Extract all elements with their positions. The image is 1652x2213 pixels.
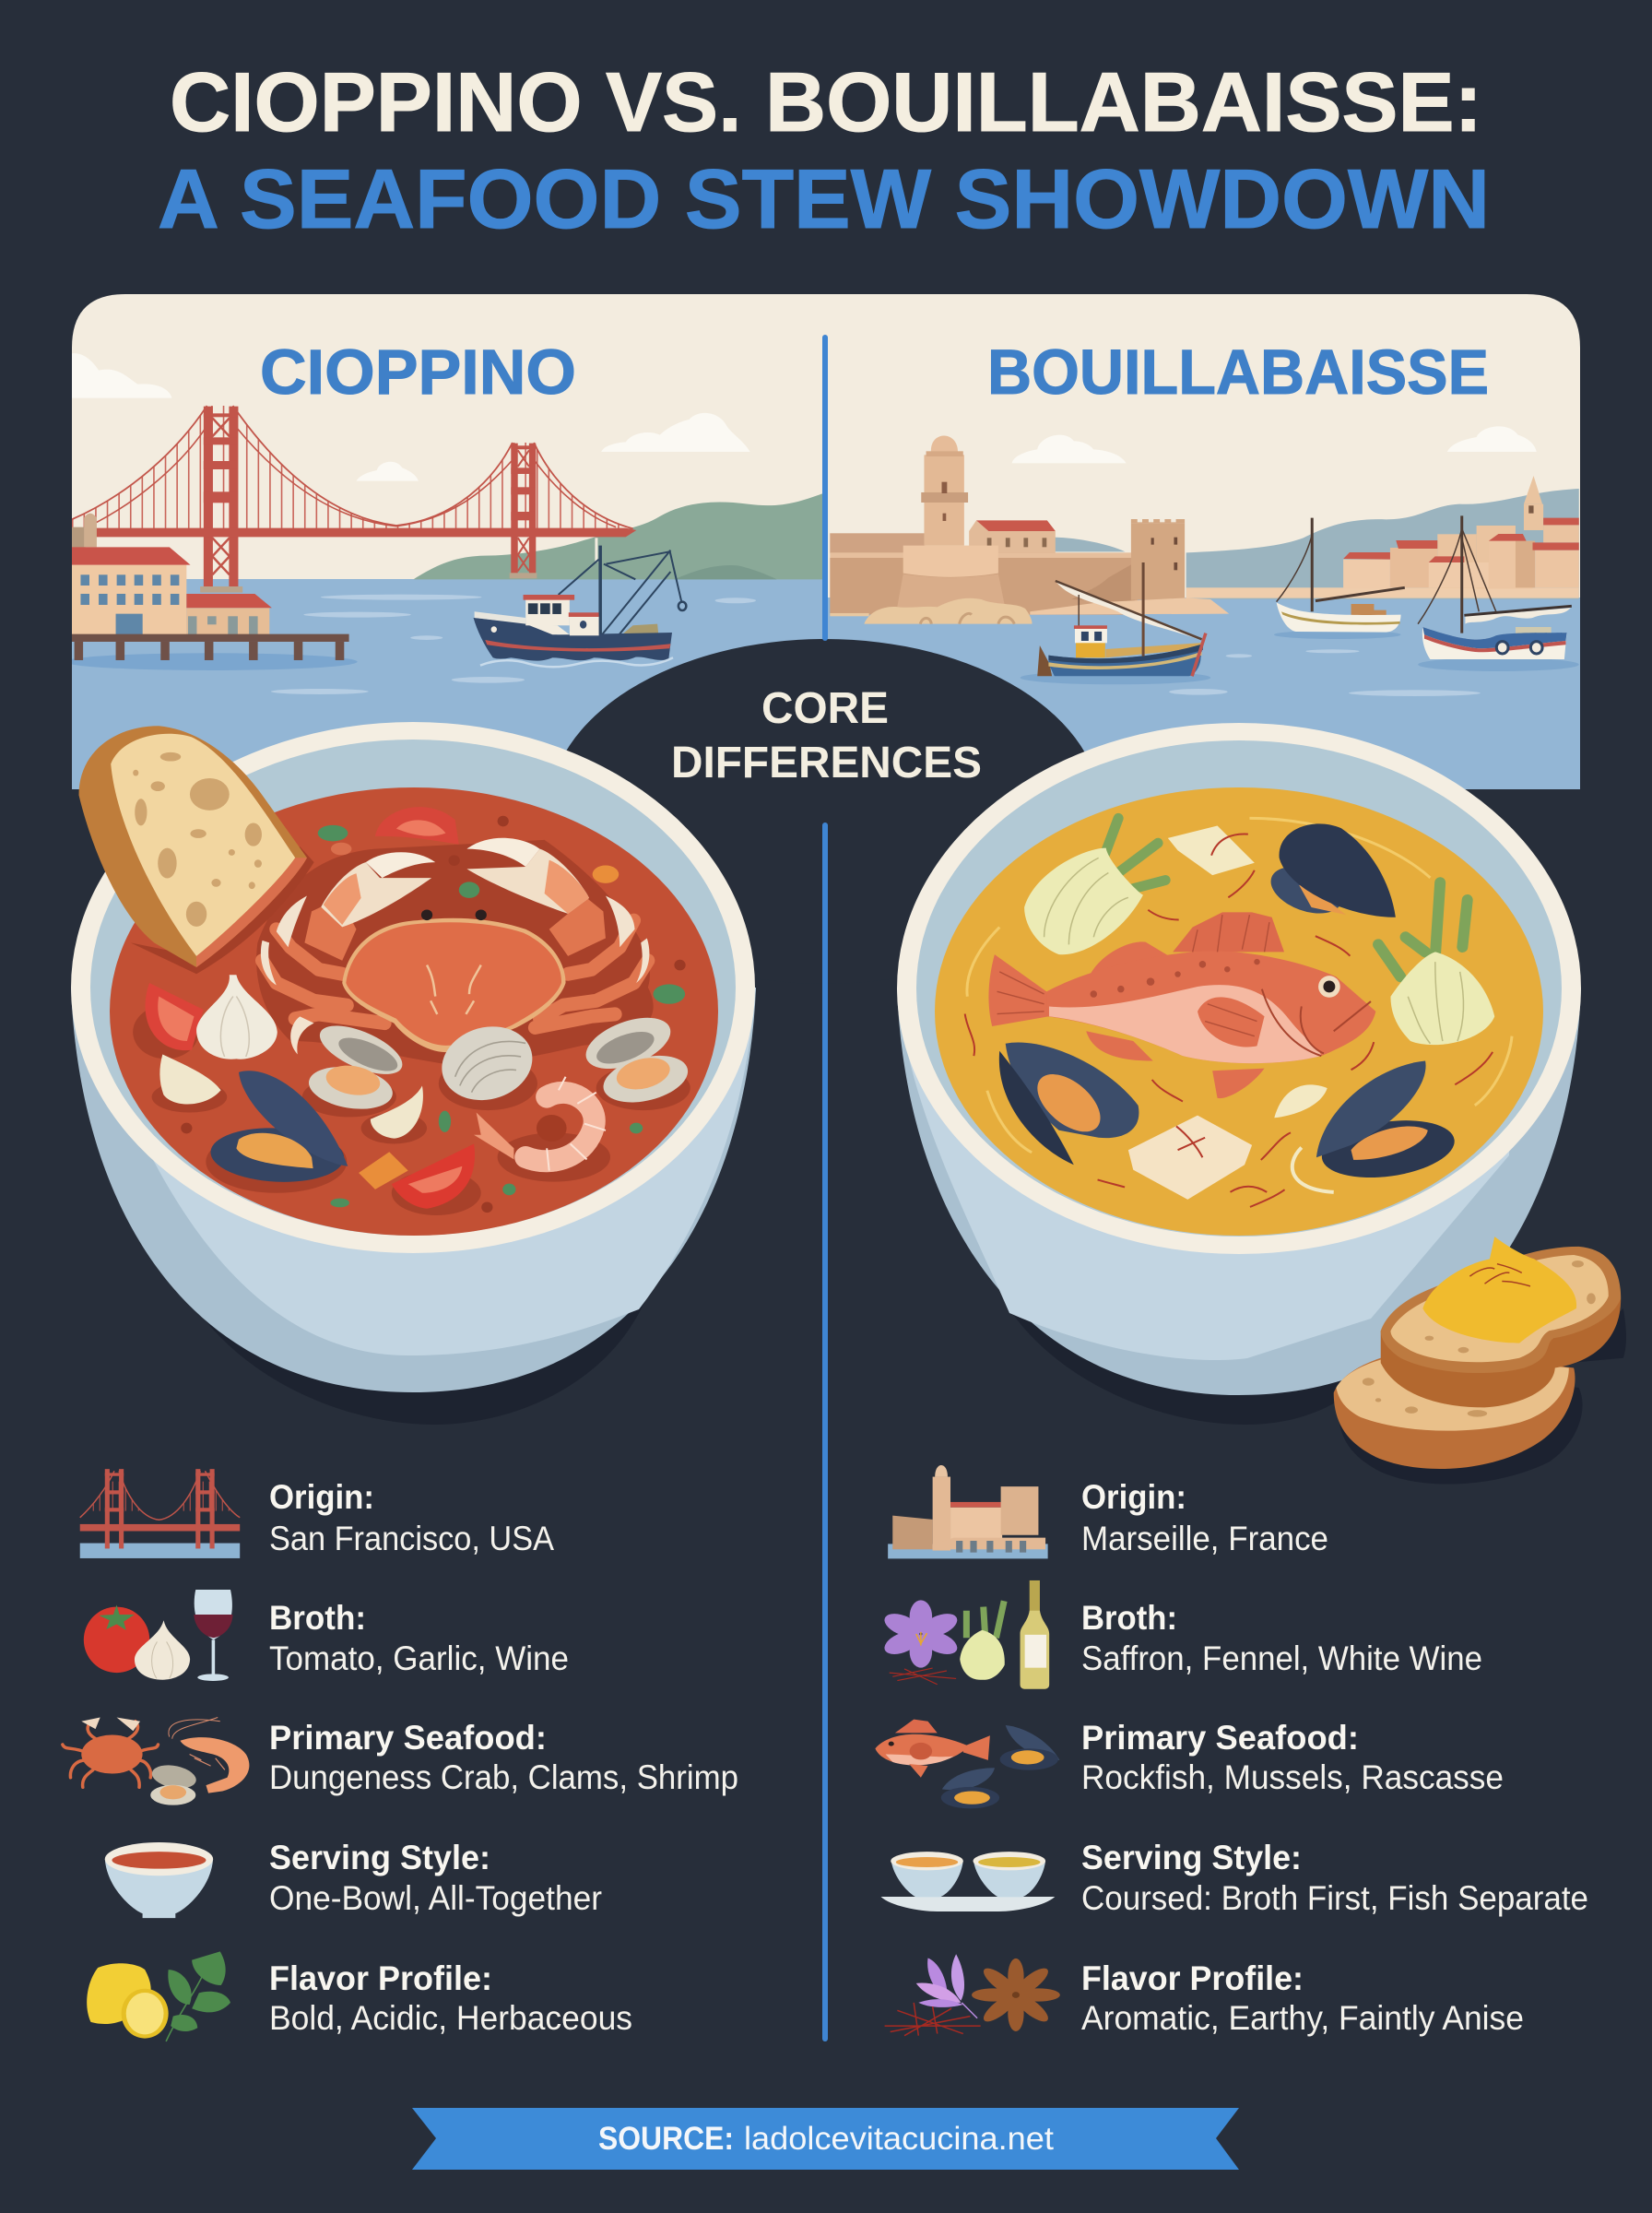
panel: cioppino bowl — [71, 722, 756, 1425]
bowl inner wall — [90, 740, 736, 1236]
text block: cioppino facts: Flavor Profile: — [269, 1959, 492, 1997]
footer: source ribbon: SOURCE: — [598, 2121, 734, 2157]
broth flecks — [181, 816, 686, 1213]
text block: bouillabaisse facts: Serving Style: — [1081, 1839, 1302, 1876]
heading: core differences: CORE — [761, 684, 889, 733]
title — [158, 56, 1490, 246]
panel: harbor scenes — [65, 294, 1580, 789]
bowl body — [71, 988, 756, 1392]
golden gate bridge — [72, 406, 636, 593]
text block: bouillabaisse facts: Rockfish, Mussels, Rascasse — [1081, 1758, 1504, 1796]
text block: bouillabaisse facts: Aromatic, Earthy, Faintly Anise — [1081, 1999, 1524, 2037]
herbs — [318, 825, 685, 1207]
text block: cioppino facts: Tomato, Garlic, Wine — [269, 1639, 569, 1677]
broth swirls — [967, 818, 1512, 1153]
carrot — [359, 1152, 408, 1189]
hills — [413, 493, 823, 579]
heading: core differences: DIFFERENCES — [671, 739, 982, 787]
panel: bouillabaisse bowl — [897, 723, 1581, 1425]
icon: golden gate bridge — [80, 1469, 240, 1558]
icon: crab shrimp clam — [63, 1718, 249, 1805]
text block: bouillabaisse facts: Marseille, France — [1081, 1520, 1328, 1557]
heading: core differences — [671, 684, 982, 787]
text block: bouillabaisse facts: Flavor Profile: — [1081, 1959, 1304, 1997]
deck — [72, 528, 636, 537]
text block: bouillabaisse facts — [1081, 1478, 1588, 2037]
saffron threads — [965, 834, 1493, 1207]
fishing boat — [474, 538, 686, 667]
arch: core differences background — [549, 639, 1102, 984]
divider bottom — [822, 822, 828, 2041]
icon: two bowls on plate — [881, 1852, 1055, 1911]
water streaks and reflections — [1021, 631, 1579, 696]
town — [1186, 476, 1579, 598]
text block: cioppino facts: Primary Seafood: — [269, 1719, 547, 1757]
text block: cioppino facts — [269, 1478, 738, 2037]
sail boat: lateen fishing boat — [1037, 562, 1206, 676]
clouds — [1012, 426, 1537, 463]
text block: cioppino facts: One-Bowl, All-Together — [269, 1879, 602, 1917]
sail boat: white sloop — [1277, 518, 1405, 633]
icon: single bowl — [105, 1842, 213, 1918]
garlic — [159, 975, 423, 1139]
text block: cioppino facts: Dungeness Crab, Clams, Shrimp — [269, 1758, 738, 1796]
footer: source ribbon: ladolcevitacucina.net — [744, 2121, 1054, 2157]
tower 2 — [511, 444, 536, 574]
tomato wedges — [146, 807, 475, 1209]
title: A SEAFOOD STEW SHOWDOWN — [158, 153, 1490, 246]
soup ingredients — [965, 818, 1512, 1207]
soup ingredients — [79, 726, 693, 1215]
divider top — [822, 335, 828, 641]
text block: cioppino facts: San Francisco, USA — [269, 1520, 554, 1557]
bowl inner wall — [916, 740, 1562, 1237]
icon: saffron fennel white wine — [879, 1580, 1049, 1689]
panel: rouille toast — [1334, 1237, 1626, 1484]
icon: fort — [888, 1465, 1048, 1558]
tomato broth — [110, 787, 718, 1236]
tower 1 — [204, 407, 238, 587]
footer: source ribbon — [412, 2108, 1239, 2170]
distant hills — [1186, 489, 1579, 599]
text block: cioppino facts: Broth: — [269, 1599, 366, 1637]
fennel right — [1378, 882, 1494, 1045]
panel: cioppino icons — [63, 1469, 249, 2041]
rockfish — [988, 912, 1375, 1098]
icon: crocus and star anise — [885, 1954, 1060, 2036]
fort — [830, 435, 1229, 624]
bowl rim — [897, 723, 1581, 1254]
text block: cioppino facts: Bold, Acidic, Herbaceous — [269, 1999, 632, 2037]
bowl rim — [71, 722, 755, 1253]
icon: lemon and parsley — [87, 1951, 230, 2041]
water streaks — [271, 595, 756, 694]
ingredient shadows — [133, 840, 690, 1215]
saffron broth — [935, 787, 1543, 1236]
fennel left — [1024, 818, 1165, 954]
mussels — [999, 823, 1458, 1185]
clouds — [72, 353, 750, 481]
shrimp — [474, 1077, 606, 1171]
bowl shadow — [184, 1291, 645, 1425]
clams — [305, 1008, 693, 1115]
text block: bouillabaisse facts: Coursed: Broth First, Fish Separate — [1081, 1879, 1588, 1917]
text block: bouillabaisse facts: Origin: — [1081, 1478, 1186, 1516]
icon: fish and mussels — [875, 1720, 1059, 1808]
bread slice — [79, 726, 314, 974]
mussel — [209, 1071, 348, 1185]
scene: Marseille harbor — [830, 426, 1579, 696]
fish chunks — [1128, 825, 1334, 1200]
bowl shadow — [1009, 1291, 1438, 1425]
title: CIOPPINO VS. BOUILLABAISSE: — [170, 56, 1482, 149]
bowl body — [897, 988, 1581, 1395]
text block: bouillabaisse facts: Saffron, Fennel, White Wine — [1081, 1639, 1482, 1677]
scene: San Francisco bay — [65, 353, 823, 694]
sail boat: blue sloop — [1418, 515, 1572, 659]
pier reflection — [65, 653, 358, 670]
text block: cioppino facts: Serving Style: — [269, 1839, 490, 1876]
panel: bouillabaisse icons — [875, 1465, 1060, 2036]
heading: bouillabaisse: BOUILLABAISSE — [987, 337, 1489, 408]
text block: bouillabaisse facts: Broth: — [1081, 1599, 1177, 1637]
icon: tomato garlic wine — [84, 1590, 233, 1681]
text block: bouillabaisse facts: Primary Seafood: — [1081, 1719, 1359, 1757]
crab — [261, 838, 649, 1055]
waterfront buildings — [72, 514, 272, 634]
text block: cioppino facts: Origin: — [269, 1478, 374, 1516]
pier — [72, 634, 349, 660]
heading: cioppino: CIOPPINO — [260, 337, 576, 408]
